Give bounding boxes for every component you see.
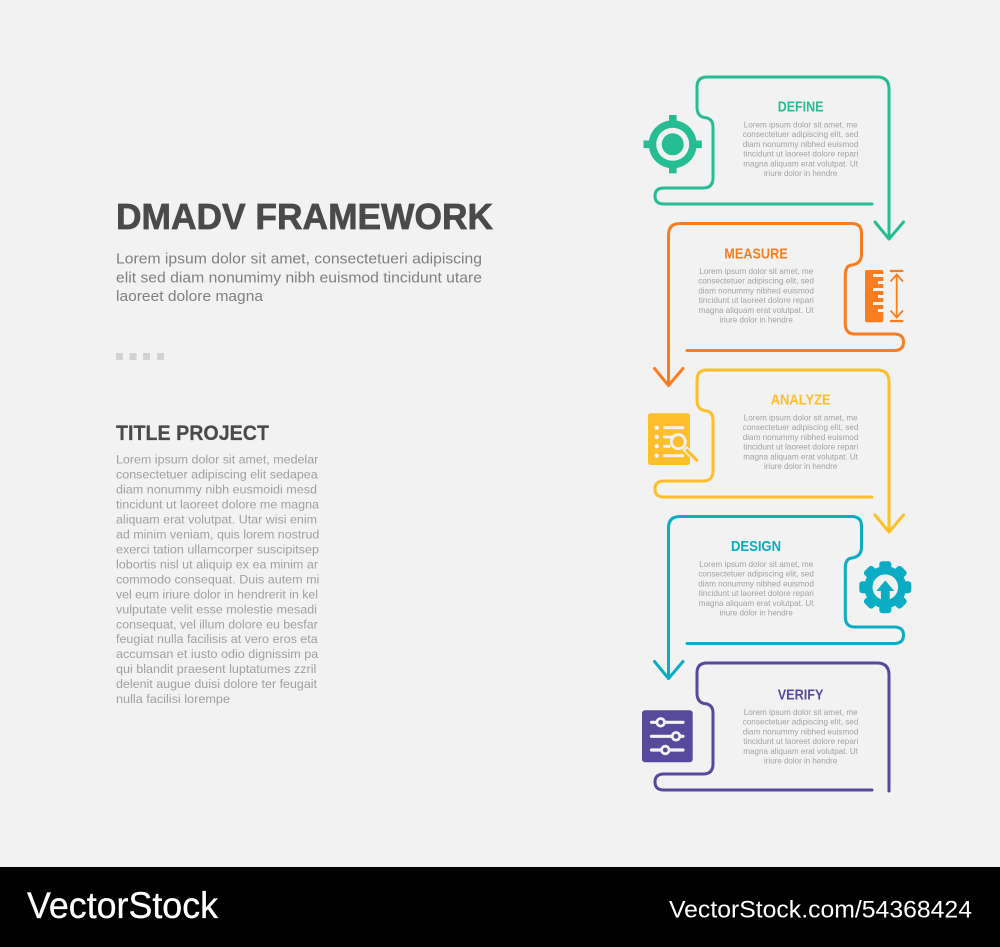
analyze heading: ANALYZE: [771, 392, 831, 408]
measure text: magna aliquam erat volutpat. Ut: [699, 305, 814, 315]
design text: diam nonummy nibhed euismod: [698, 578, 814, 588]
step: measure: [654, 224, 904, 386]
define text: [743, 119, 859, 178]
analyze connector with arrow: [655, 370, 904, 532]
analyze text: magna aliquam erat volutpat. Ut: [743, 451, 859, 461]
project paragraph: vel eum iriure dolor in hendrerit in kel: [116, 587, 318, 601]
design text: iriure dolor in hendre: [720, 608, 793, 618]
step: analyze: [648, 370, 904, 532]
design connector with arrow: [654, 516, 904, 678]
verify text: consectetuer adipiscing elit, sed: [743, 717, 859, 727]
verify text: diam nonummy nibhed euismod: [743, 726, 859, 736]
project paragraph: consectetuer adipiscing elit sedapea: [116, 468, 318, 482]
project paragraph: qui blandit praesent luptatumes zzril: [116, 662, 316, 676]
analyze text: [743, 412, 859, 471]
icon: sliders: [642, 710, 693, 762]
project heading: TITLE PROJECT: [116, 421, 269, 445]
project paragraph: ad minim veniam, quis lorem nostrud: [116, 527, 319, 541]
footer logo: VectorStock: [27, 885, 218, 926]
measure text: [698, 266, 814, 324]
analyze text: iriure dolor in hendre: [764, 461, 838, 471]
measure text: diam nonummy nibhed euismod: [698, 285, 814, 295]
separator dots: [116, 353, 164, 360]
subtitle text block: Lorem ipsum dolor sit amet, consectetueri adipiscing: [116, 252, 482, 268]
icon: document with magnifier: [648, 413, 698, 465]
project paragraph: Lorem ipsum dolor sit amet, medelar: [116, 452, 318, 466]
measure text: tincidunt ut laoreet dolore repari: [699, 295, 814, 305]
define text: Lorem ipsum dolor sit amet, me: [744, 119, 858, 129]
verify text: magna aliquam erat volutpat. Ut: [743, 746, 859, 756]
design heading: DESIGN: [731, 539, 781, 555]
step: design: [654, 516, 911, 678]
define text: tincidunt ut laoreet dolore repari: [743, 148, 858, 158]
main title: DMADV FRAMEWORK: [116, 196, 494, 237]
project paragraph: consequat, vel illum dolore eu besfar: [116, 617, 318, 631]
measure connector with arrow: [654, 224, 904, 386]
design text: Lorem ipsum dolor sit amet, me: [699, 559, 814, 569]
icon: ruler: [865, 270, 903, 322]
step: verify: [642, 663, 889, 791]
measure text: iriure dolor in hendre: [720, 314, 793, 324]
design text: tincidunt ut laoreet dolore repari: [699, 588, 814, 598]
footer bar: [0, 867, 1000, 947]
footer image id: VectorStock.com/54368424: [669, 896, 972, 924]
project paragraph: diam nonummy nibh eusmoidi mesd: [116, 482, 317, 496]
verify heading: VERIFY: [778, 687, 824, 703]
icon: target: [644, 115, 702, 173]
subtitle text block: elit sed diam nonumimy nibh euismod tincidunt utare: [116, 270, 482, 286]
define text: magna aliquam erat volutpat. Ut: [743, 158, 859, 168]
define text: consectetuer adipiscing elit, sed: [743, 129, 859, 139]
project paragraph: lobortis nisl ut aliquip ex ea minim ar: [116, 557, 318, 571]
verify text: tincidunt ut laoreet dolore repari: [743, 736, 858, 746]
analyze text: tincidunt ut laoreet dolore repari: [743, 442, 858, 452]
analyze text: Lorem ipsum dolor sit amet, me: [744, 412, 858, 422]
verify text: [743, 707, 859, 766]
design text: magna aliquam erat volutpat. Ut: [699, 598, 814, 608]
project paragraph: accumsan et iusto odio dignissim pa: [116, 647, 319, 661]
project paragraph: commodo consequat. Duis autem mi: [116, 572, 319, 586]
define text: iriure dolor in hendre: [764, 168, 838, 178]
analyze text: diam nonummy nibhed euismod: [743, 432, 859, 442]
project paragraph: delenit augue duisi dolore ter feugait: [116, 677, 318, 691]
project paragraph: vulputate velit esse molestie mesadi: [116, 602, 317, 616]
define text: diam nonummy nibhed euismod: [743, 139, 859, 149]
step: define: [644, 77, 904, 239]
subtitle text block: [116, 252, 482, 305]
verify connector: [655, 663, 889, 791]
measure text: Lorem ipsum dolor sit amet, me: [699, 266, 814, 276]
analyze text: consectetuer adipiscing elit, sed: [743, 422, 859, 432]
define connector with arrow: [655, 77, 904, 239]
verify text: Lorem ipsum dolor sit amet, me: [744, 707, 858, 717]
define heading: DEFINE: [778, 100, 824, 116]
project paragraph: nulla facilisi lorempe: [116, 692, 230, 706]
project paragraph: exerci tation ullamcorper suscipitsep: [116, 542, 319, 556]
measure heading: MEASURE: [724, 247, 788, 263]
design text: [698, 559, 814, 618]
icon: gear with up arrow: [859, 561, 911, 613]
project paragraph: feugiat nulla facilisis at vero eros eta: [116, 632, 318, 646]
project paragraph: aliquam erat volutpat. Utar wisi enim: [116, 512, 317, 526]
subtitle text block: laoreet dolore magna: [116, 289, 264, 305]
measure text: consectetuer adipiscing elit, sed: [698, 276, 814, 286]
project paragraph: [116, 452, 319, 706]
verify text: iriure dolor in hendre: [764, 756, 838, 766]
design text: consectetuer adipiscing elit, sed: [698, 568, 814, 578]
project paragraph: tincidunt ut laoreet dolore me magna: [116, 497, 319, 511]
